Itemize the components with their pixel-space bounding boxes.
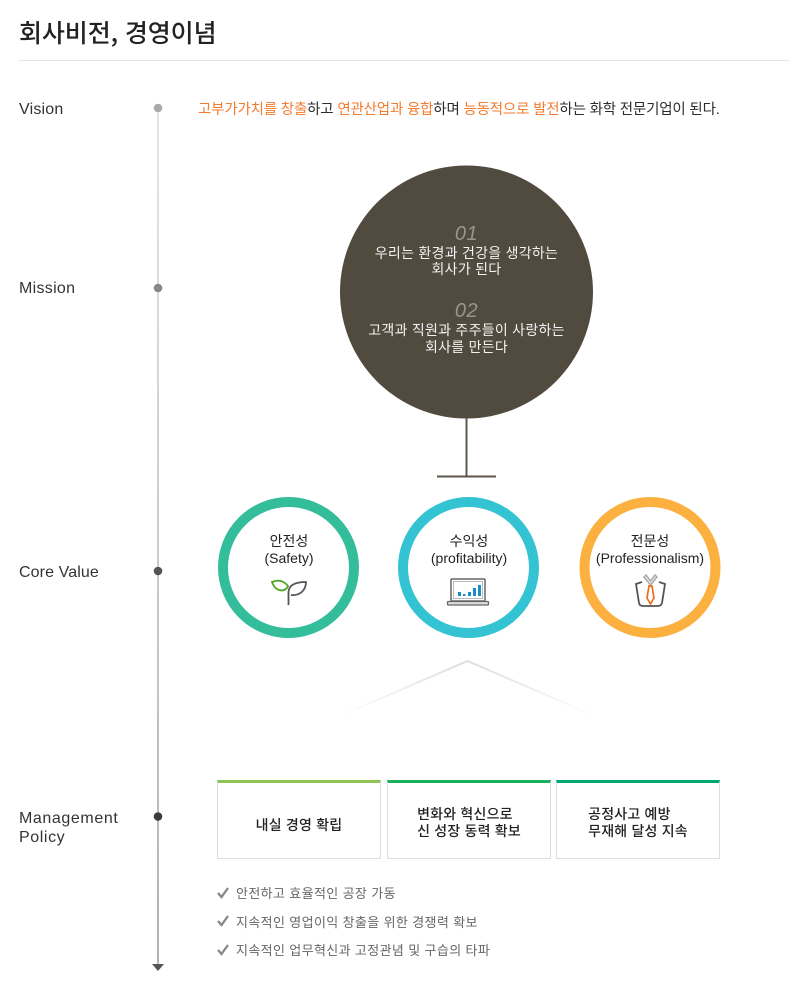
core value rings [218, 497, 720, 638]
mission text: 회사를 만든다 [425, 338, 508, 354]
list item 3: 지속적인 업무혁신과 고정관념 및 구습의 타파 [236, 943, 490, 958]
list item 1: 안전하고 효율적인 공장 가동 [236, 886, 396, 901]
policy box 2: 신 성장 동력 확보 [417, 822, 521, 838]
title: 회사비전, 경영이념 [19, 14, 216, 50]
icon: laptop chart [446, 578, 490, 606]
mission text: 우리는 환경과 건강을 생각하는 [375, 244, 558, 260]
core value: profitability: (profitability) [431, 550, 507, 566]
list item 2: 지속적인 영업이익 창출을 위한 경쟁력 확보 [236, 914, 478, 930]
chevron connector [370, 660, 564, 704]
mission text [368, 222, 565, 354]
label: Management Policy [19, 810, 118, 846]
core value: professionalism: (Professionalism) [596, 550, 704, 566]
mission text: 고객과 직원과 주주들이 사랑하는 [368, 322, 565, 338]
policy box 3: 무재해 달성 지속 [588, 822, 688, 838]
label: Management Policy: Policy [19, 829, 65, 846]
core value: safety: 안전성 [270, 533, 308, 549]
core value: profitability [431, 533, 507, 566]
label: Management Policy: Management [19, 810, 118, 827]
policy box 3 [556, 780, 720, 859]
icon: sprout [270, 580, 307, 605]
policy box 3: 공정사고 예방 [588, 806, 671, 822]
policy box 2 [387, 780, 551, 859]
timeline axis with dots and arrow [152, 104, 164, 971]
label: Mission: Mission [19, 280, 75, 297]
mission text: 01 [455, 222, 478, 244]
core value: safety [264, 533, 314, 566]
icon: shirt and necktie [635, 574, 666, 607]
core value: professionalism [596, 533, 704, 566]
policy box 1: 내실 경영 확립 [256, 817, 342, 833]
core value: safety: (Safety) [264, 550, 314, 566]
mission text: 02 [455, 300, 478, 322]
policy box 1 [217, 780, 381, 859]
mission circle with stem [340, 166, 593, 478]
label: Vision: Vision [19, 101, 64, 118]
core value: profitability: 수익성 [450, 533, 488, 549]
core value: professionalism: 전문성 [631, 533, 669, 549]
vision statement: 고부가가치를 창출하고 연관산업과 융합하며 능동적으로 발전하는 화학 전문기업이 된다. [198, 102, 720, 118]
policy box 2: 변화와 혁신으로 [417, 806, 513, 822]
label: Core Value: Core Value [19, 564, 99, 581]
mission text: 회사가 된다 [432, 261, 501, 277]
check marks [217, 887, 229, 956]
